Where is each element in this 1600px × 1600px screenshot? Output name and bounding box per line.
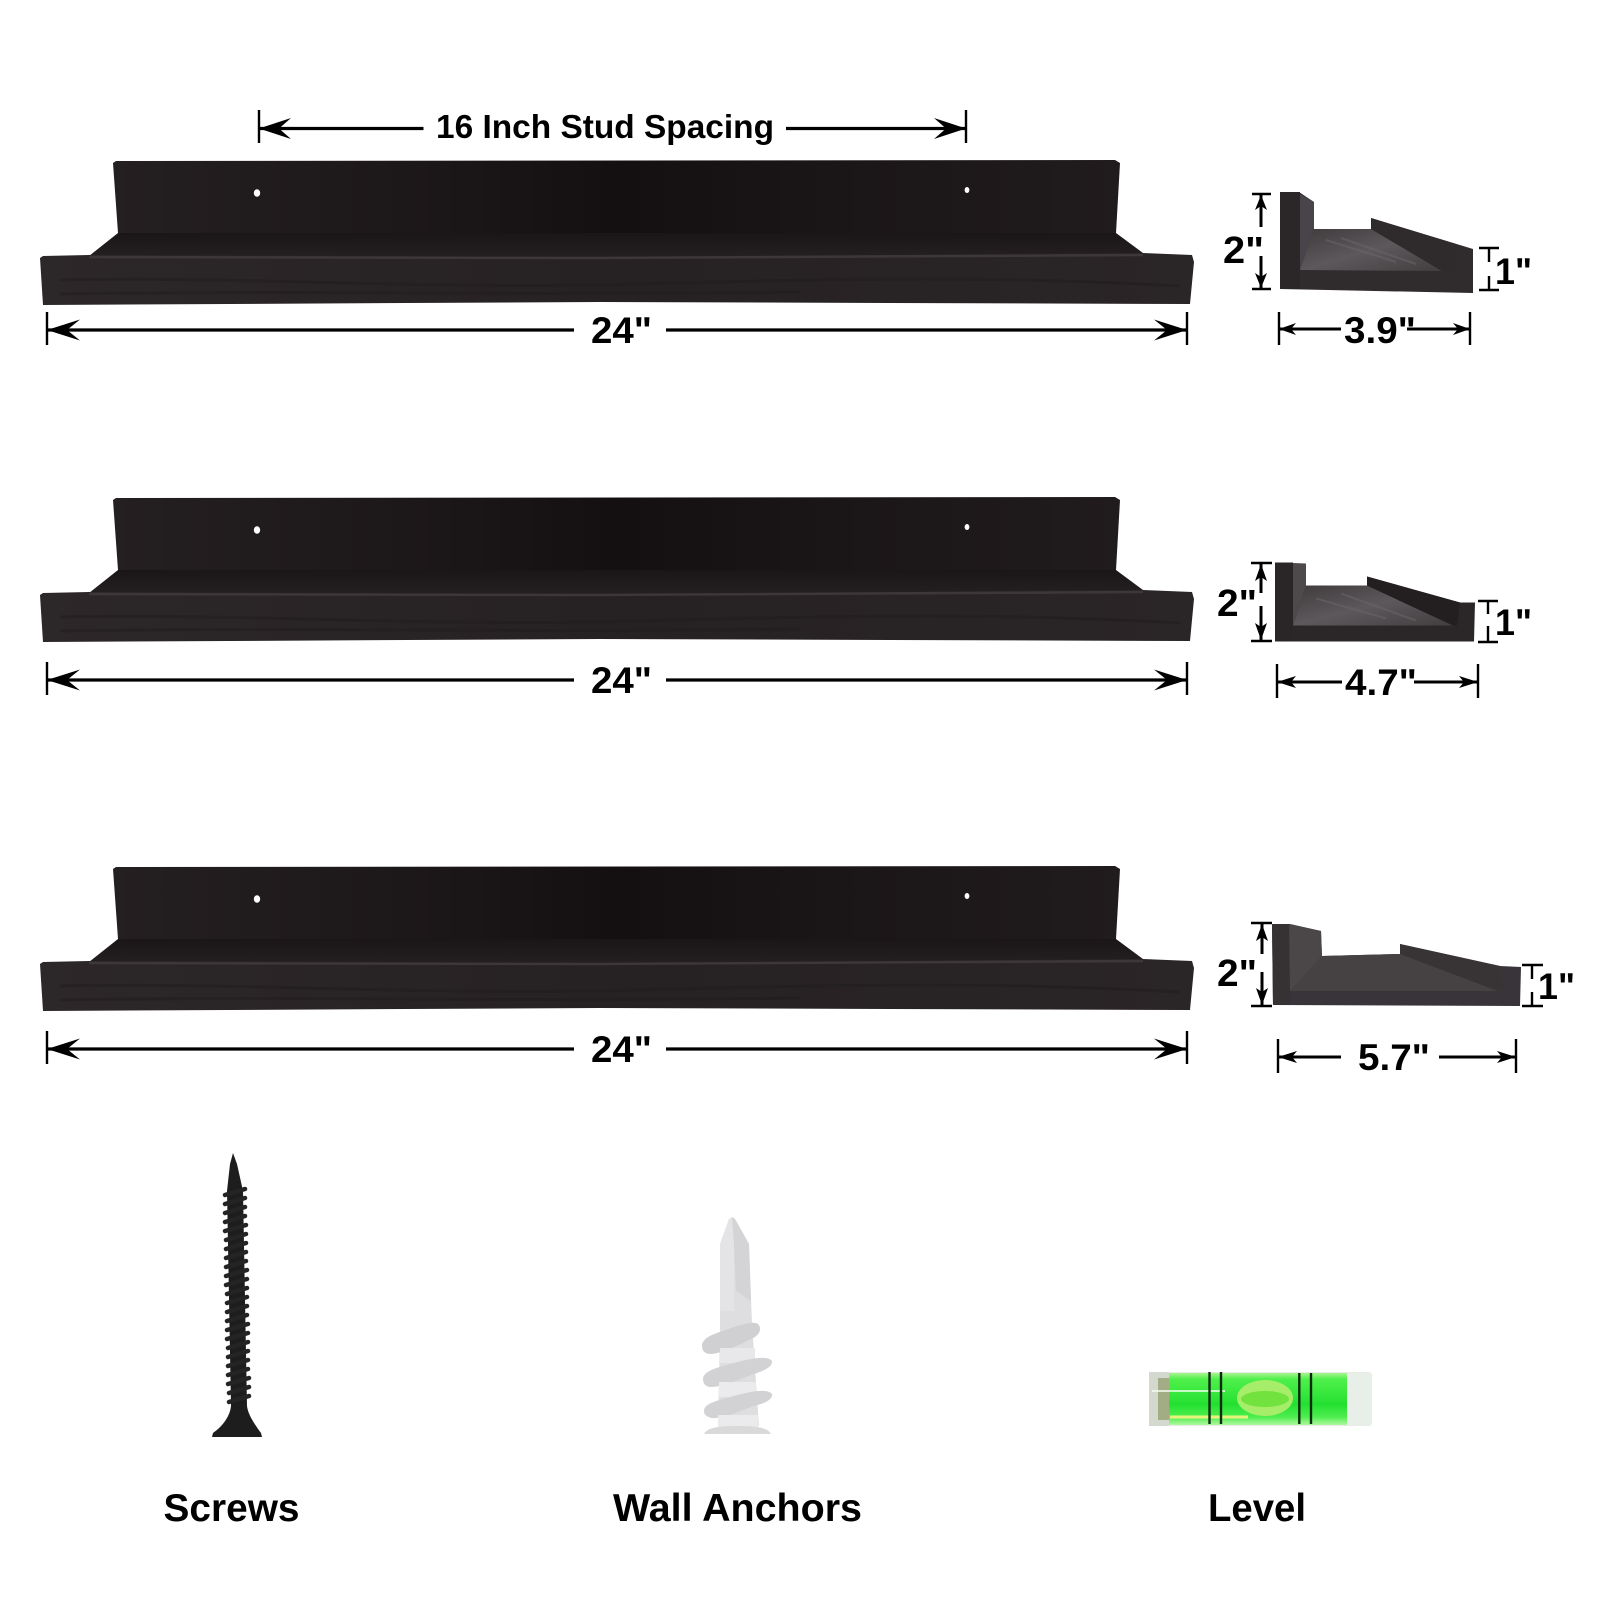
dimension: 1 inch lip (1478, 601, 1532, 643)
dimension: 2 inch height: 2" (1217, 953, 1257, 995)
panel: shelf 1 (40, 109, 1532, 351)
label: screws: Screws (164, 1487, 300, 1530)
dimension: 24 inch width (47, 1028, 1187, 1070)
dimension: 1 inch lip: 1" (1495, 251, 1532, 292)
dimension: 3.9 inch depth: 3.9" (1344, 309, 1416, 351)
dimension: 24 inch width (47, 309, 1187, 351)
dimension: 4.7 inch depth: 4.7" (1345, 661, 1417, 703)
dimension: 5.7 inch depth: 5.7" (1358, 1036, 1430, 1078)
dimension: 1 inch lip: 1" (1495, 602, 1532, 643)
dimension: 2 inch height: 2" (1223, 230, 1264, 272)
dimension: 2 inch height (1217, 563, 1272, 641)
shelf front view 1 (40, 160, 1194, 305)
dimension: 2 inch height: 2" (1217, 583, 1257, 625)
dimension: 2 inch height (1217, 923, 1272, 1006)
dimension: 24 inch width: 24" (591, 309, 652, 351)
label: wall anchors: Wall Anchors (613, 1487, 862, 1530)
dimension: 16 inch stud spacing (259, 109, 966, 146)
shelf profile 5.7 inch (1272, 924, 1521, 1006)
dimension: 2 inch height (1223, 194, 1271, 289)
shelf front view 2 (40, 497, 1194, 642)
panel: shelf 3 (40, 866, 1575, 1078)
dimension: 3.9 inch depth (1279, 309, 1470, 351)
dimension: 1 inch lip: 1" (1538, 966, 1575, 1007)
icon: wall anchor (702, 1217, 772, 1434)
dimension: 5.7 inch depth (1278, 1036, 1516, 1078)
dimension: 4.7 inch depth (1277, 661, 1478, 703)
shelf profile 4.7 inch (1275, 562, 1475, 642)
dimension: 24 inch width: 24" (591, 659, 652, 701)
shelf front view 3 (40, 866, 1194, 1011)
label: level: Level (1208, 1487, 1306, 1530)
shelf profile 3.9 inch (1280, 192, 1473, 293)
icon: screw (212, 1153, 262, 1437)
dimension: 16 inch stud spacing: 16 Inch Stud Spacing (436, 109, 774, 146)
dimension: 1 inch lip (1479, 248, 1532, 292)
dimension: 1 inch lip (1522, 965, 1575, 1007)
dimension: 24 inch width (47, 659, 1187, 701)
icon: bubble level (1149, 1372, 1372, 1426)
panel: shelf 2 (40, 497, 1532, 703)
dimension: 24 inch width: 24" (591, 1028, 652, 1070)
